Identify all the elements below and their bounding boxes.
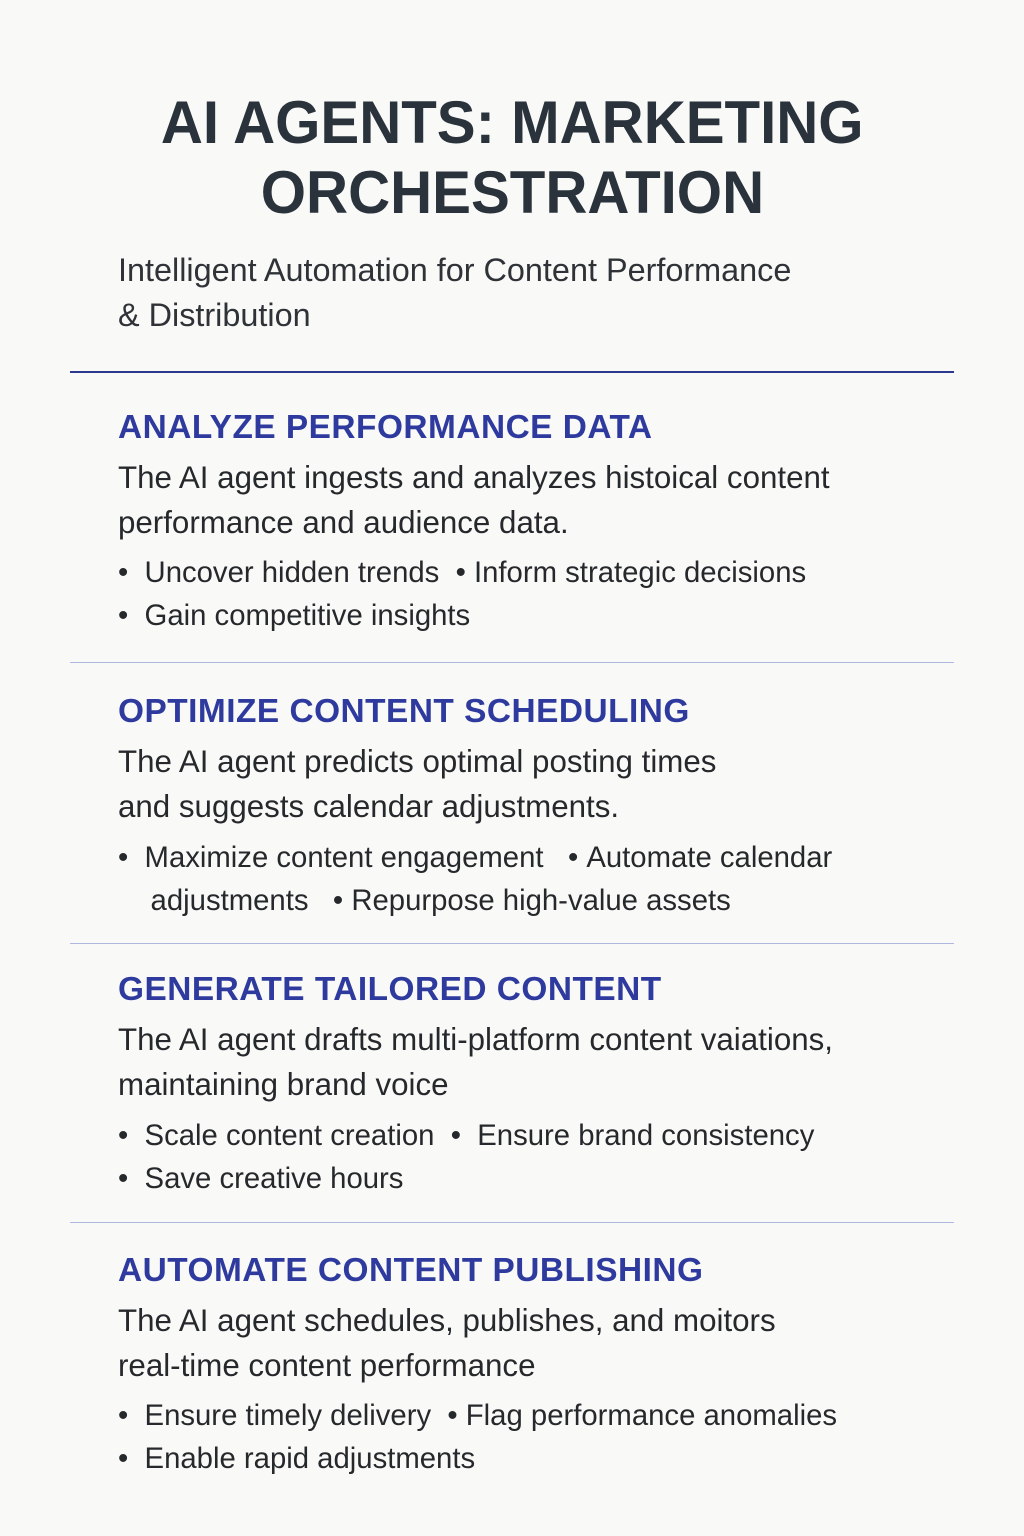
panel: optimize bbox=[118, 693, 832, 917]
text: automate description bbox=[118, 1303, 776, 1383]
bullets: optimize: adjustments • Repurpose high-value assets bbox=[151, 884, 731, 917]
text: generate description: The AI agent drafts multi-platform content vaiations, bbox=[118, 1022, 833, 1057]
bullets: optimize bbox=[118, 841, 832, 917]
heading: analyze: ANALYZE PERFORMANCE DATA bbox=[118, 409, 653, 446]
bullets: generate: • Save creative hours bbox=[118, 1162, 403, 1195]
text: analyze description bbox=[118, 460, 830, 540]
text: generate description: maintaining brand voice bbox=[118, 1067, 449, 1102]
panel: analyze bbox=[118, 409, 830, 632]
text: optimize description: The AI agent predicts optimal posting times bbox=[118, 744, 716, 779]
bullets: automate: • Enable rapid adjustments bbox=[118, 1442, 475, 1475]
text: analyze description: performance and audience data. bbox=[118, 505, 569, 540]
bullets: automate: • Ensure timely delivery • Flag performance anomalies bbox=[118, 1399, 837, 1432]
text: optimize description bbox=[118, 744, 716, 824]
text: automate description: The AI agent schedules, publishes, and moitors bbox=[118, 1303, 776, 1338]
bullets: analyze: • Uncover hidden trends • Inform strategic decisions bbox=[118, 556, 806, 589]
heading: optimize: OPTIMIZE CONTENT SCHEDULING bbox=[118, 693, 690, 730]
bullets: automate bbox=[118, 1399, 837, 1475]
text: generate description bbox=[118, 1022, 833, 1102]
heading: automate: AUTOMATE CONTENT PUBLISHING bbox=[118, 1252, 703, 1289]
subtitle: Intelligent Automation for Content Performance bbox=[118, 252, 791, 288]
title: AI AGENTS: MARKETING bbox=[161, 89, 863, 156]
bullets: optimize: • Maximize content engagement • Automate calendar bbox=[118, 841, 832, 874]
panel: automate bbox=[118, 1252, 837, 1475]
title: ORCHESTRATION bbox=[260, 159, 764, 226]
text: optimize description: and suggests calendar adjustments. bbox=[118, 789, 619, 824]
bullets: generate: • Scale content creation • Ensure brand consistency bbox=[118, 1119, 814, 1152]
text: automate description: real-time content performance bbox=[118, 1348, 535, 1383]
panel: generate bbox=[118, 971, 833, 1195]
subtitle bbox=[118, 252, 791, 333]
bullets: generate bbox=[118, 1119, 814, 1195]
text: analyze description: The AI agent ingests and analyzes histoical content bbox=[118, 460, 830, 495]
title bbox=[161, 89, 863, 226]
bullets: analyze: • Gain competitive insights bbox=[118, 599, 470, 632]
heading: generate: GENERATE TAILORED CONTENT bbox=[118, 971, 662, 1008]
subtitle: & Distribution bbox=[118, 297, 311, 333]
bullets: analyze bbox=[118, 556, 806, 632]
